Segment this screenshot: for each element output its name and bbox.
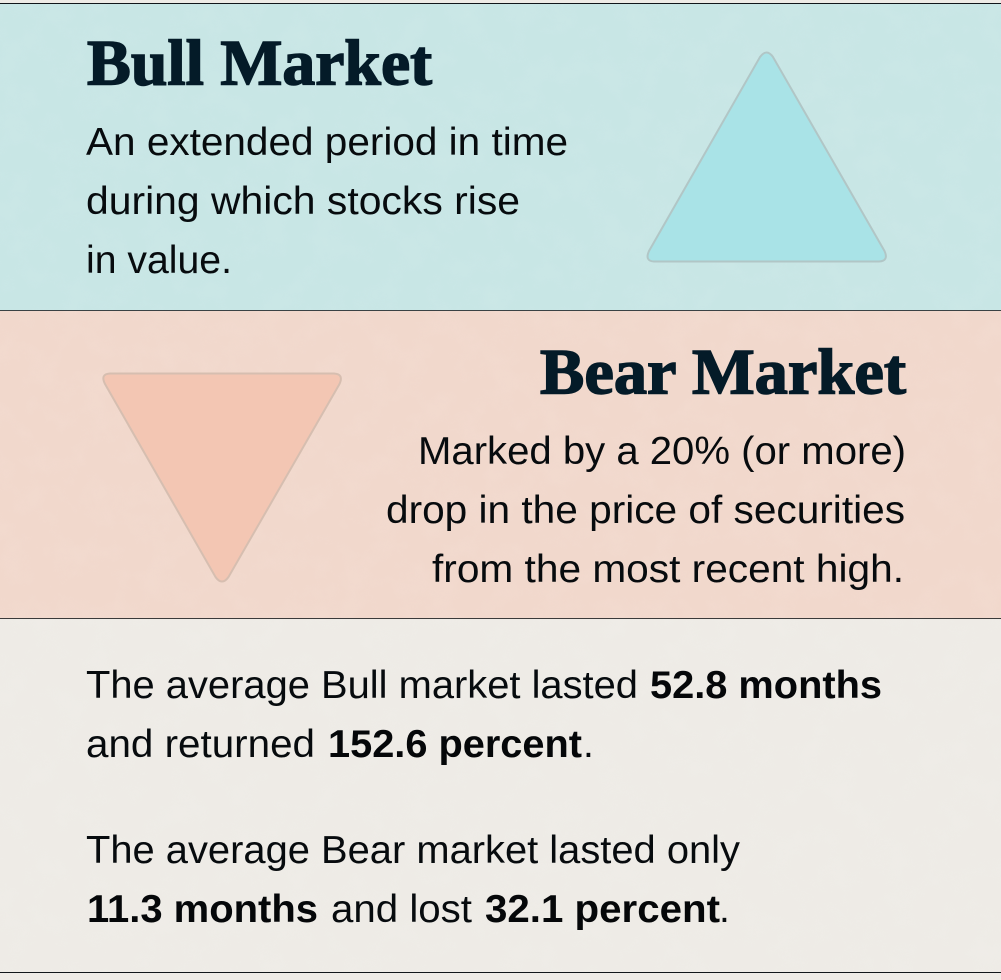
text: bear market definition: Marked by a 20% (or more) — [418, 430, 906, 473]
icon: upward triangle — [648, 52, 886, 262]
text: bear market definition: drop in the price of securities — [386, 489, 905, 532]
text: average bull market: The average Bull market lasted — [86, 664, 638, 707]
text: average bull market: 152.6 percent — [328, 723, 582, 766]
text: average bull market — [86, 664, 882, 766]
text: average bear market — [86, 829, 740, 931]
text: average bull market: . — [583, 723, 594, 766]
text: average bull market: and returned — [86, 723, 315, 766]
text: average bear market: and lost — [331, 888, 472, 931]
panel: bull market — [0, 3, 1001, 310]
text: average bull market: 52.8 months — [650, 664, 882, 707]
text: bull market definition — [86, 121, 568, 282]
text: bull market definition: An extended period in time — [86, 121, 568, 164]
text: average bear market: The average Bear market lasted only — [86, 829, 740, 872]
text: average bear market: 32.1 percent — [485, 888, 720, 931]
text: bear market definition: from the most recent high. — [432, 548, 904, 591]
panel: bear market — [0, 311, 1001, 618]
heading: bear market: Bear Market — [540, 336, 906, 408]
text: bull market definition: in value. — [86, 239, 232, 282]
text: bear market definition — [386, 430, 906, 591]
text: bull market definition: during which stocks rise — [86, 180, 520, 223]
panel: averages — [86, 664, 882, 931]
text: average bear market: 11.3 months — [87, 888, 318, 931]
text: average bear market: . — [719, 888, 730, 931]
icon: downward triangle — [103, 374, 341, 582]
heading: bull market: Bull Market — [87, 28, 432, 100]
